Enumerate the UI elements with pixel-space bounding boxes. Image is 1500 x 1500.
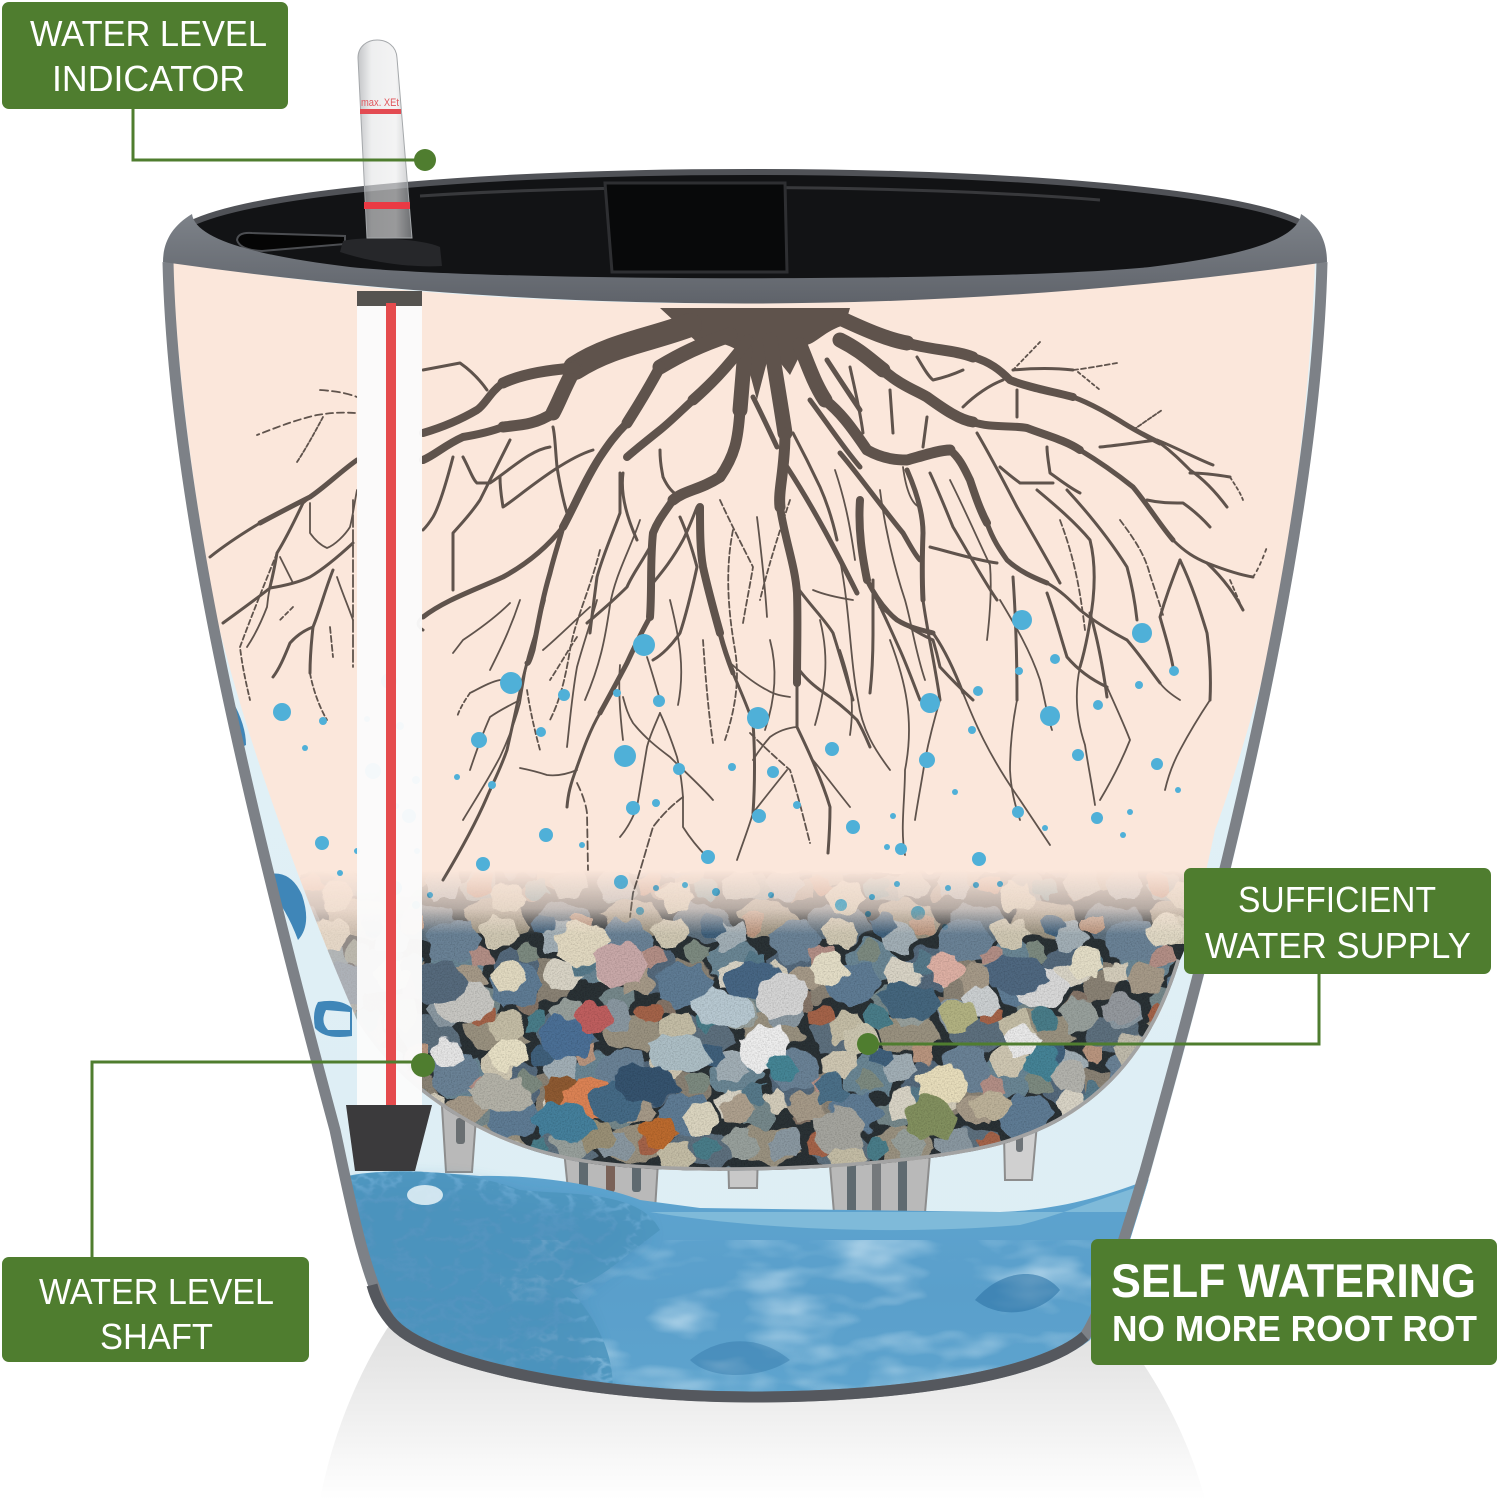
callout: self watering xyxy=(1091,1239,1497,1365)
inner liner xyxy=(190,170,1303,296)
individual stones xyxy=(412,916,1185,1151)
callout: self watering: NO MORE ROOT ROT xyxy=(1112,1308,1477,1349)
water droplets xyxy=(273,610,1181,930)
pot body xyxy=(163,262,1327,1402)
dark churning water xyxy=(340,1184,645,1400)
water reservoir xyxy=(350,1170,1149,1392)
blue droplets on pot wall xyxy=(228,700,352,1037)
shaft tube xyxy=(357,292,422,1107)
plant roots xyxy=(210,308,1267,917)
pot outline xyxy=(168,262,1322,1397)
shaft cap xyxy=(357,291,422,306)
red float rod xyxy=(386,303,396,1106)
water shadows xyxy=(975,1274,1060,1312)
callout: water level indicator: INDICATOR xyxy=(52,58,245,99)
liner highlight xyxy=(420,187,1100,200)
glass tube xyxy=(358,40,412,238)
callout: sufficient water supply xyxy=(857,868,1491,1055)
pot rim and black inner liner xyxy=(163,170,1327,304)
foot 4 xyxy=(827,1130,932,1225)
water level indicator tube xyxy=(340,40,442,266)
peach soil area xyxy=(172,262,1315,1171)
callout: water level indicator xyxy=(2,2,436,171)
max text: max. XEt xyxy=(361,97,399,109)
pale water highlights xyxy=(500,1240,1092,1392)
float band xyxy=(364,202,410,209)
max band xyxy=(360,109,401,114)
callout: water level shaft: WATER LEVEL xyxy=(39,1271,274,1312)
callout: water level shaft xyxy=(2,1053,435,1362)
liner back wall xyxy=(190,172,1303,224)
floor shadow xyxy=(320,1310,1205,1500)
gravel bowl edge xyxy=(357,960,1180,1171)
callout: sufficient water supply: WATER SUPPLY xyxy=(1205,925,1471,966)
foot 1 xyxy=(441,1090,478,1172)
planter pot xyxy=(174,264,1316,1233)
foot 2 xyxy=(562,1130,660,1210)
shaft foot xyxy=(346,1105,432,1171)
swirling water texture xyxy=(350,1171,660,1384)
callout: water level shaft: SHAFT xyxy=(100,1316,213,1357)
base collar xyxy=(340,238,442,266)
water level shaft xyxy=(346,291,432,1171)
pot base shadow edge xyxy=(372,1285,1085,1397)
callout: sufficient water supply: SUFFICIENT xyxy=(1238,879,1436,920)
gravel layer xyxy=(300,874,1184,1171)
front rim band xyxy=(163,214,1327,304)
callout: water level indicator: WATER LEVEL xyxy=(30,13,267,54)
wicking feet xyxy=(441,1090,1040,1225)
foot 5 xyxy=(1003,1090,1040,1180)
root crown xyxy=(660,308,850,400)
foot 3 xyxy=(728,1150,758,1188)
left liner slot xyxy=(237,233,345,251)
gravel base layers xyxy=(300,874,1184,1171)
callout: self watering: SELF WATERING xyxy=(1111,1254,1476,1307)
liner square fill port xyxy=(605,183,787,272)
